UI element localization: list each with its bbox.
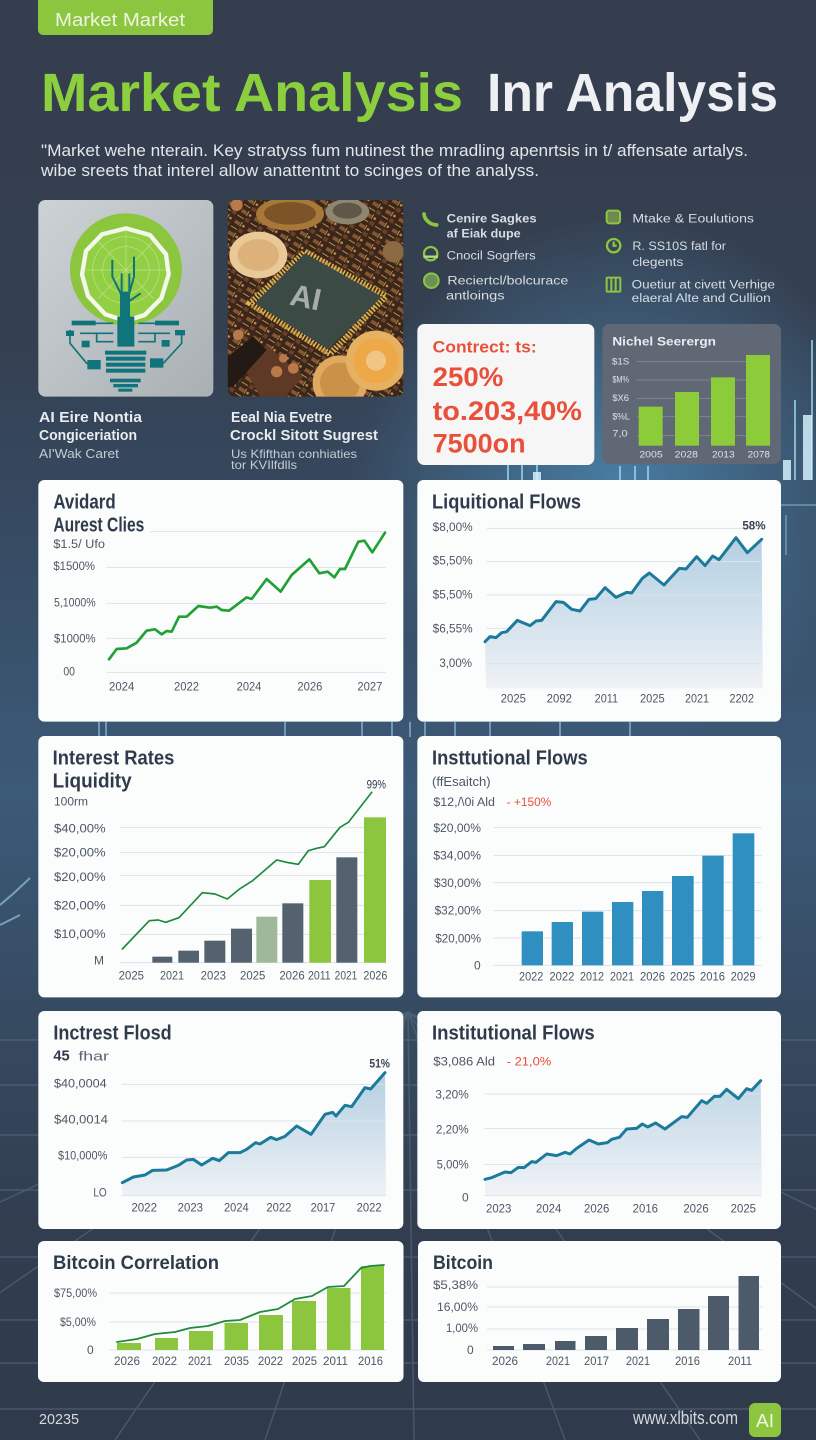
panel: interest rates combo chart: 100rm	[54, 795, 88, 809]
top badge: Market Market	[55, 10, 185, 30]
panel: interest rates combo chart: $40,00%	[54, 821, 106, 835]
image panel: AI chip and coins	[228, 197, 406, 410]
panel: institutional flows area chart: 2025	[731, 1201, 756, 1215]
list text	[446, 212, 775, 305]
panel: interest rates combo chart: $20,00%	[54, 898, 106, 912]
footer: www.xlbits.com	[632, 1408, 738, 1428]
panel: interest rates combo chart: $20,00%	[54, 870, 106, 884]
image panel: AI tree emblem	[38, 200, 213, 397]
stat card: Contrect: ts:	[433, 338, 537, 357]
image captions	[39, 410, 378, 472]
panel: institutional flows area chart: 3,20%	[435, 1087, 469, 1101]
panel: institutional flows area chart: 2026	[584, 1201, 610, 1215]
panel: bitcoin correlation chart: $5,00%	[60, 1315, 96, 1329]
panel: liquidity area chart: 2202	[729, 692, 754, 706]
panel: bitcoin bar chart: 1,00%	[446, 1321, 478, 1335]
list text: Cenire Sagkes	[447, 212, 537, 226]
panel: interest rates combo chart: 2023	[201, 968, 226, 982]
mini bar chart panel: $M%	[612, 375, 629, 385]
panel: green line chart: 2024	[237, 679, 262, 693]
panel: liquidity area chart: $8,00%	[433, 520, 473, 534]
panel: bitcoin bar chart: $5,38%	[433, 1278, 478, 1292]
panel: liquidity area chart: 3,00%	[439, 656, 472, 670]
mini bar chart panel: 2005	[639, 450, 663, 460]
panel: interest rates combo chart: 2026	[279, 968, 305, 982]
panel: bitcoin correlation chart: $75,00%	[54, 1286, 97, 1300]
footer	[39, 1403, 781, 1437]
panel: interest flows area chart: 2017	[311, 1201, 336, 1215]
panel: institutional flows area chart: 2023	[486, 1201, 512, 1215]
panel: interest rates combo chart: 2011	[308, 968, 331, 982]
panel: bitcoin bar chart: 2021	[626, 1354, 650, 1368]
panel: institutional flows bar chart: $34,00%	[433, 848, 481, 862]
panel: interest flows area chart: fhar	[78, 1050, 109, 1064]
panel: bitcoin correlation chart: 2026	[114, 1354, 140, 1368]
panel: bitcoin correlation chart: 2035	[224, 1354, 249, 1368]
panel: interest rates combo chart: 2021	[335, 968, 358, 982]
panel: interest flows area chart: $40,0004	[54, 1077, 107, 1091]
panel: liquidity area chart: 2011	[595, 692, 618, 706]
panel: institutional flows bar chart: 2026	[640, 969, 665, 983]
image captions: tor KVIlfdlls	[231, 458, 297, 472]
panel: institutional flows area chart	[417, 1011, 781, 1229]
list text: Reciertcl/bolcurace	[447, 274, 569, 288]
panel: interest rates combo chart: 2025	[119, 968, 144, 982]
panel: interest rates combo chart: Interest Rates	[53, 747, 174, 769]
list text: Ouetiur at civett Verhige	[632, 277, 775, 291]
panel: institutional flows area chart: 2016	[633, 1201, 658, 1215]
panel: interest rates combo chart: 2025	[240, 968, 266, 982]
panel: institutional flows bar chart: $30,00%	[434, 876, 481, 890]
panel: green line chart: 2022	[174, 679, 199, 693]
panel: green line chart: 00	[63, 664, 75, 678]
panel: interest flows area chart: 2022	[357, 1201, 382, 1215]
icon: recycle	[423, 247, 438, 260]
panel: bitcoin bar chart: 2026	[492, 1354, 518, 1368]
panel: institutional flows area chart: 5,00%	[437, 1157, 469, 1171]
icon: clock	[607, 239, 620, 252]
panel: green line chart: $1.5/ Ufo	[53, 537, 105, 551]
panel: green line chart: 2024	[109, 679, 135, 693]
mini bar chart panel: $%L	[612, 412, 630, 422]
panel: institutional flows bar chart: 2012	[580, 969, 604, 983]
panel: interest flows area chart: LO	[93, 1186, 107, 1200]
panel: institutional flows area chart: 2026	[683, 1201, 709, 1215]
panel: bitcoin correlation chart: 2022	[152, 1354, 177, 1368]
panel: bitcoin bar chart: Bitcoin	[433, 1252, 493, 1274]
panel: liquidity area chart: $5,50%	[433, 587, 473, 601]
intro text: wibe sreets that interel allow anattentnt to scinges of the analyss.	[40, 161, 539, 180]
panel: institutional flows bar chart: $12,/\0i Ald	[433, 795, 495, 809]
panel: interest rates combo chart	[38, 736, 403, 997]
panel: institutional flows bar chart: $20,00%	[433, 821, 481, 835]
panel: liquidity area chart: 2021	[685, 692, 709, 706]
panel: liquidity area chart: $6,55%	[433, 621, 473, 635]
panel: interest rates combo chart: 2026	[363, 968, 388, 982]
footer: AI	[756, 1411, 774, 1431]
intro text	[40, 141, 748, 180]
panel: interest rates combo chart: $20,00%	[54, 846, 106, 860]
panel: institutional flows bar chart: 2025	[670, 969, 695, 983]
intro text: "Market wehe nterain. Key stratyss fum nutinest the mradling apenrtsis in t/ affensate artalys.	[41, 141, 748, 160]
top badge	[38, 0, 213, 35]
panel: liquidity area chart	[417, 480, 781, 722]
panel: bitcoin bar chart: 16,00%	[437, 1300, 478, 1314]
panel: bitcoin bar chart: 2021	[546, 1354, 570, 1368]
panel: institutional flows bar chart: 2022	[549, 969, 575, 983]
panel: bitcoin correlation chart	[38, 1241, 404, 1382]
icon: globe	[424, 273, 439, 288]
list text: Mtake & Eoulutions	[632, 212, 754, 226]
icon: tablet	[607, 211, 620, 223]
feature list with icons	[423, 211, 775, 305]
panel: institutional flows bar chart: - +150%	[507, 795, 552, 809]
panel: interest flows area chart: 2024	[224, 1201, 249, 1215]
list text: af Eiak dupe	[447, 226, 521, 240]
panel: liquidity area chart: 2092	[547, 692, 572, 706]
panel: liquidity area chart: 2025	[501, 692, 526, 706]
panel: institutional flows area chart: Institutional Flows	[432, 1022, 595, 1044]
image captions: Eeal Nia Evetre	[231, 410, 332, 426]
mini bar chart panel: 7,0	[612, 429, 628, 439]
panel: institutional flows bar chart: $20,00%	[435, 932, 481, 946]
mini bar chart panel: 2028	[675, 450, 698, 460]
icon: phone	[424, 214, 437, 225]
panel: institutional flows area chart: - 21,0%	[507, 1055, 552, 1069]
panel: interest rates combo chart: 99%	[367, 777, 386, 791]
panel: institutional flows bar chart: 2029	[731, 969, 756, 983]
mini bar chart panel: $1S	[612, 356, 629, 366]
panel: institutional flows bar chart	[417, 736, 781, 997]
panel: interest flows area chart: $40,0014	[54, 1113, 108, 1127]
panel: interest flows area chart: 45	[53, 1049, 70, 1065]
panel: institutional flows bar chart: Insttutional Flows	[432, 748, 588, 770]
panel: interest flows area chart: $10,000%	[58, 1149, 108, 1163]
stat card	[417, 324, 594, 465]
panel: green line chart: $1500%	[53, 559, 95, 573]
image panel: AI chip and coins: AI	[287, 278, 324, 318]
panel: interest rates combo chart: $10,00%	[54, 927, 106, 941]
panel: bitcoin correlation chart: 2025	[292, 1354, 317, 1368]
panel: interest flows area chart: 2022	[266, 1201, 292, 1215]
panel: interest flows area chart: 51%	[369, 1056, 390, 1070]
panel: bitcoin correlation chart: 2011	[323, 1354, 348, 1368]
title: Inr Analysis	[487, 63, 778, 123]
list text: R. SS10S fatl for	[632, 239, 726, 253]
mini bar chart panel: 2078	[748, 450, 770, 460]
panel: bitcoin bar chart: 2016	[675, 1354, 700, 1368]
footer: 20235	[39, 1411, 79, 1428]
panel: institutional flows area chart: 2024	[536, 1201, 562, 1215]
panel: institutional flows bar chart: 2021	[610, 969, 634, 983]
panel: liquidity area chart: Liquitional Flows	[432, 492, 581, 514]
panel: institutional flows area chart: 0	[462, 1190, 469, 1204]
panel: bitcoin bar chart: 0	[467, 1343, 474, 1357]
panel: bitcoin bar chart: 2011	[728, 1354, 752, 1368]
stat card: to.203,40%	[433, 396, 582, 426]
mini bar chart panel	[602, 324, 781, 464]
panel: green line chart: $1000%	[54, 632, 96, 646]
list text: elaeral Alte and Cullion	[632, 291, 771, 305]
panel: interest flows area chart: 2023	[178, 1201, 203, 1215]
panel: institutional flows bar chart: 2022	[519, 969, 544, 983]
panel: institutional flows area chart: $3,086 Ald	[433, 1055, 495, 1069]
list text: Cnocil Sogrfers	[447, 248, 536, 262]
panel: liquidity area chart: $5,50%	[433, 553, 473, 567]
panel: bitcoin correlation chart: 2021	[188, 1354, 212, 1368]
panel: green line chart: 2027	[357, 679, 383, 693]
panel: liquidity area chart: 2025	[640, 692, 665, 706]
panel: green line chart: Avidard	[53, 491, 116, 513]
panel: bitcoin bar chart: 2017	[584, 1354, 609, 1368]
panel: interest rates combo chart: 2021	[160, 968, 184, 982]
stat card: 7500on	[433, 428, 526, 458]
panel: institutional flows area chart: 2,20%	[436, 1122, 469, 1136]
panel: bitcoin correlation chart: 0	[87, 1343, 94, 1357]
panel: institutional flows bar chart: 0	[474, 959, 481, 973]
stat card: 250%	[433, 362, 503, 392]
image captions: Us Kfifthan conhiaties	[231, 447, 357, 461]
mini bar chart panel: $X6	[612, 393, 629, 403]
panel: bitcoin correlation chart: Bitcoin Correlation	[53, 1252, 219, 1274]
title: Market Analysis	[41, 63, 463, 123]
image captions: Crockl Sitott Sugrest	[230, 428, 378, 444]
panel: interest rates combo chart: Liquidity	[53, 770, 132, 792]
panel: interest flows area chart: Inctrest Flosd	[53, 1022, 172, 1044]
panel: bitcoin correlation chart: 2016	[358, 1354, 383, 1368]
panel: institutional flows bar chart: (ffEsaitch)	[432, 775, 491, 789]
title	[41, 63, 778, 123]
panel: interest flows area chart	[38, 1011, 403, 1229]
panel: green line chart: Aurest Clies	[53, 515, 144, 537]
panel: green line chart: 5,1000%	[54, 596, 96, 610]
panel: institutional flows bar chart: $32,00%	[435, 904, 481, 918]
mini bar chart panel: Nichel Seerergn	[612, 335, 716, 349]
panel: liquidity area chart: 58%	[742, 518, 766, 532]
panel: interest rates combo chart: M	[94, 953, 104, 967]
panel: interest flows area chart: 2022	[131, 1201, 157, 1215]
mini bar chart panel: 2013	[712, 450, 735, 460]
image captions: AI Eire Nontia	[39, 410, 143, 426]
panel: bitcoin bar chart	[418, 1241, 781, 1382]
panel: bitcoin correlation chart: 2022	[258, 1354, 283, 1368]
icon: grid	[607, 278, 620, 292]
panel: green line chart: 2026	[297, 679, 323, 693]
panel: institutional flows bar chart: 2016	[700, 969, 725, 983]
panel: green line chart	[38, 480, 403, 722]
list text: antloings	[446, 288, 505, 302]
image captions: Congiceriation	[39, 428, 137, 444]
image captions: AI'Wak Caret	[39, 446, 119, 461]
list text: clegents	[632, 255, 683, 269]
